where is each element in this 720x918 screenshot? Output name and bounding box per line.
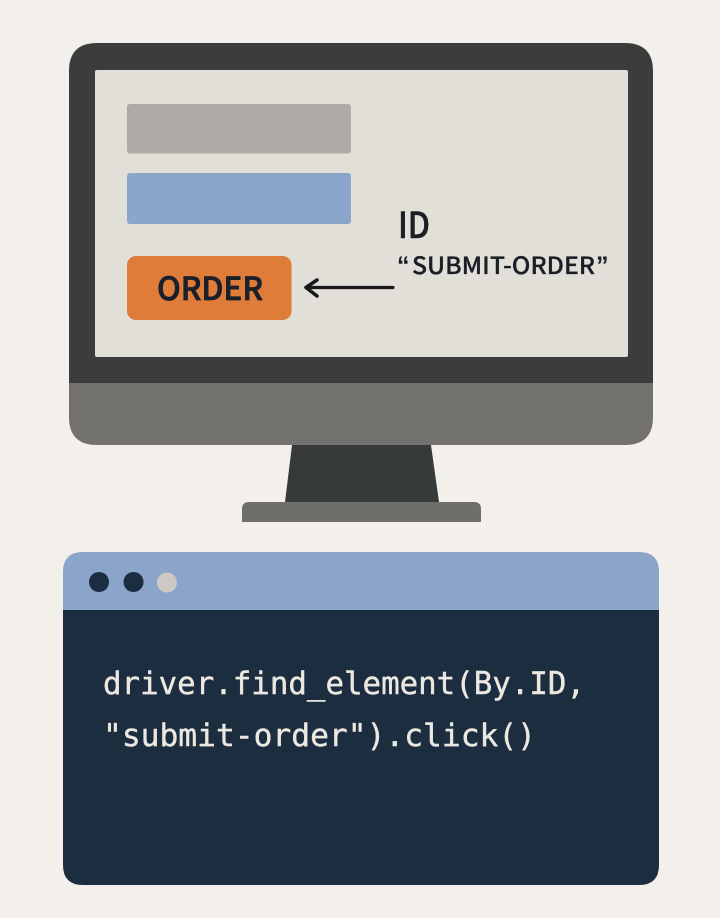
code text: driver.find_element(By.ID, — [103, 666, 585, 702]
stand neck — [285, 445, 439, 502]
code window — [63, 552, 659, 885]
stand base — [242, 502, 481, 522]
gray input field — [127, 104, 351, 154]
monitor chin — [69, 383, 653, 445]
ID label: ID — [398, 197, 430, 249]
submit-order label: “ — [397, 252, 410, 280]
window body — [63, 610, 659, 885]
submit-order label: ” — [596, 252, 608, 280]
code text — [103, 666, 585, 754]
monitor bezel — [69, 43, 653, 383]
monitor — [69, 43, 653, 522]
submit-order label: SUBMIT-ORDER — [412, 246, 595, 281]
blue input field — [127, 173, 351, 224]
order button — [127, 256, 292, 320]
title bar — [63, 552, 659, 610]
screen — [95, 70, 628, 357]
window dots — [89, 572, 177, 592]
arrow pointing to button — [306, 280, 393, 296]
code text: "submit-order").click() — [103, 718, 536, 754]
order button: ORDER — [157, 264, 263, 310]
